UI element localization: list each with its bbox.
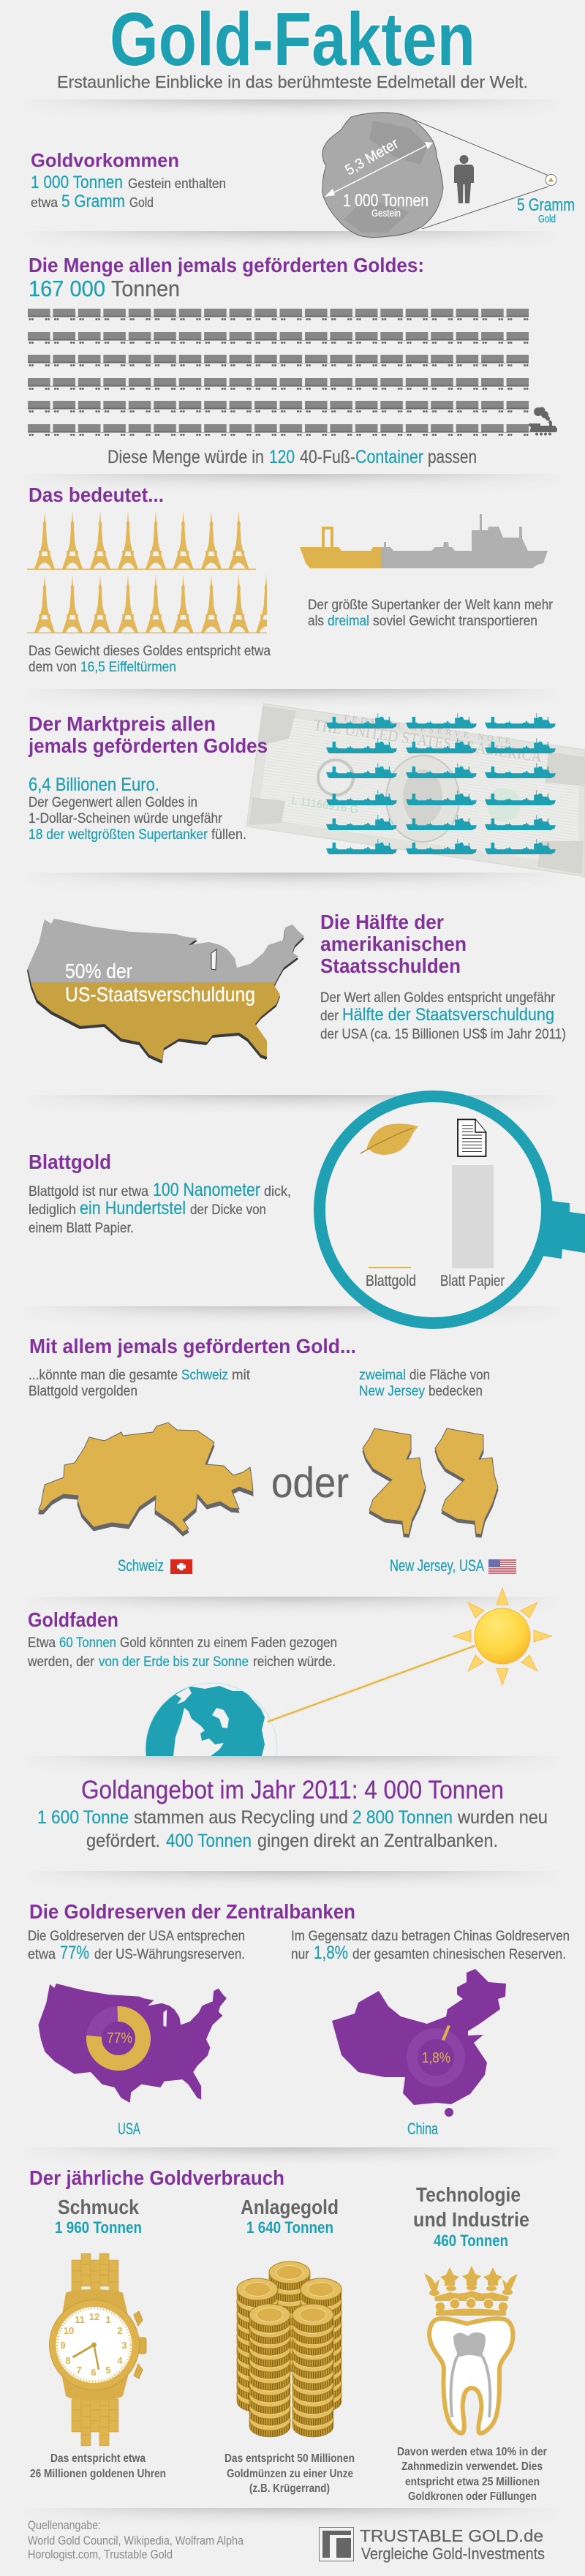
caption: passen: [428, 447, 477, 467]
text block: einem Blatt Papier.: [29, 1221, 134, 1236]
icon: watch: 11: [75, 2314, 85, 2325]
icon: watch: 6: [91, 2367, 97, 2378]
text left: [29, 1368, 251, 1399]
column: Schmuck: 1 960 Tonnen: [55, 2218, 142, 2237]
text left: ...könnte man die gesamte: [29, 1368, 178, 1383]
panel: Marktpreis: [28, 704, 585, 877]
gold thread: [268, 1646, 475, 1722]
label: 5 Gramm: [517, 195, 575, 225]
text block: 60 Tonnen: [59, 1635, 116, 1651]
text: tanker: soviel Gewicht transportieren: [373, 614, 537, 629]
heading: [28, 712, 268, 757]
icon: earth: [145, 1682, 278, 1756]
big number: 167 000: [29, 276, 105, 301]
image: dollar bill: THE UNITED STATES OF AMERICA: [312, 715, 543, 766]
map: USA split: US-Staatsverschuldung: [65, 983, 255, 1006]
text right: bedecken: [429, 1384, 483, 1399]
footer: sources: Quellenangabe:: [28, 2518, 101, 2532]
text: tanker: [308, 598, 554, 629]
icon: sun: [453, 1588, 551, 1685]
text block: werden, der: [27, 1654, 95, 1670]
heading: Die Hälfte der: [320, 911, 444, 933]
icon: rock: [322, 113, 443, 237]
caption: Zahnmedizin verwendet. Dies: [401, 2460, 543, 2473]
text: Eiffel: 16,5 Eiffeltürmen: [80, 660, 176, 675]
icon: watch: 9: [60, 2340, 66, 2351]
heading: [320, 911, 467, 977]
heading: Blattgold: [29, 1150, 111, 1173]
heading: Der jährliche Goldverbrauch: [29, 2166, 284, 2189]
text left: Schweiz: [181, 1368, 228, 1383]
labels: Blatt Papier: [440, 1273, 505, 1289]
text block: [37, 1807, 548, 1851]
text block: stammen aus Recycling und: [134, 1807, 348, 1828]
column: Anlagegold: (z.B. Krügerrand): [249, 2482, 330, 2495]
text: tanker: dreimal: [328, 614, 369, 629]
labels: USA: [118, 2120, 140, 2138]
text block: 100 Nanometer: [153, 1180, 260, 1200]
map: USA with donut 77%: [38, 1984, 227, 2103]
text block: füllen.: [211, 827, 246, 843]
subtitle: Erstaunliche Einblicke in das berühmteste Edelmetall der Welt.: [57, 72, 528, 91]
text block: lediglich: [29, 1202, 76, 1218]
label: New Jersey: New Jersey, USA: [390, 1556, 484, 1575]
text: Eiffel: dem von: [29, 660, 77, 675]
text right: die Fläche von: [410, 1368, 490, 1383]
text right: New Jersey: [359, 1384, 425, 1399]
map: USA split: [27, 919, 304, 1063]
text block: reichen würde.: [253, 1654, 336, 1670]
heading: Mit allem jemals geförderten Gold...: [29, 1335, 356, 1357]
map: New Jersey twice: [363, 1428, 498, 1537]
icon: watch: 3: [121, 2340, 127, 2351]
map: USA split: 50% der: [65, 960, 132, 982]
text block: etwa: [31, 195, 58, 210]
icon: person: [454, 155, 474, 203]
icon: magnifier: [320, 1096, 585, 1323]
text block: der Dicke von: [190, 1202, 266, 1218]
icon: tanker: [300, 514, 548, 568]
big number: Tonnen: [111, 276, 180, 301]
icon: gold dot: [546, 174, 556, 186]
logo: Trustable Gold: [319, 2526, 545, 2563]
heading: Goldvorkommen: [31, 149, 179, 171]
text right: [291, 1929, 570, 1963]
text right: [359, 1368, 490, 1399]
icon: watch: 5: [105, 2365, 111, 2376]
heading: Staatsschulden: [320, 954, 461, 977]
icon: rock: 1 000 Tonnen: [343, 191, 429, 211]
caption: [397, 2446, 547, 2503]
heading: Der Marktpreis allen: [29, 712, 216, 735]
text block: Der Gegenwert allen Goldes in: [29, 795, 197, 810]
icon: watch: 4: [117, 2355, 123, 2366]
text right: zweimal: [359, 1368, 406, 1383]
text: tanker: Der größte Supertanker der Welt kann mehr: [308, 598, 554, 613]
footer: sources: [28, 2518, 244, 2561]
text block: Gestein enthalten: [128, 176, 226, 191]
column: Anlagegold: 1 640 Tonnen: [246, 2218, 333, 2237]
map: China with donut 1,8%: [332, 1969, 506, 2117]
heading: Die Goldreserven der Zentralbanken: [29, 1900, 355, 1923]
labels: Blattgold: [366, 1273, 416, 1289]
icon: watch: 2: [117, 2325, 123, 2336]
text right: nur: [291, 1947, 310, 1962]
big number: [29, 276, 180, 301]
text block: 400 Tonnen: [166, 1831, 252, 1851]
map: USA with donut 77%: 77%: [107, 2030, 132, 2046]
column: Anlagegold: [224, 2196, 355, 2495]
text left: der US-Währungsreserven.: [94, 1947, 245, 1962]
icon: locomotive: [529, 407, 557, 436]
caption: entspricht etwa 25 Millionen: [405, 2476, 540, 2488]
text block: der: [320, 1009, 339, 1024]
image: dollar bill: L 11166916 G: [290, 794, 359, 816]
text: Eiffel: [29, 644, 271, 675]
heading: amerikanischen: [320, 933, 467, 955]
label: Schweiz: Schweiz: [118, 1556, 164, 1575]
icon: tooth: [429, 2319, 513, 2433]
column: Schmuck: Das entspricht etwa: [50, 2452, 146, 2465]
text right: der gesamten chinesischen Reserven.: [352, 1947, 566, 1962]
text block: [27, 1635, 337, 1670]
panel: Goldverbrauch: [29, 2166, 547, 2503]
text: oder: oder: [271, 1459, 349, 1507]
chart: supertanker grid: [326, 713, 556, 854]
column: Schmuck: 26 Millionen goldenen Uhren: [30, 2468, 166, 2480]
icon: gold leaf: [361, 1123, 418, 1155]
labels: [366, 1273, 505, 1289]
caption: 120: [269, 447, 295, 467]
caption: Goldkronen oder Füllungen: [408, 2490, 537, 2503]
panel: Das bedeutet: [27, 483, 554, 675]
footer: sources: World Gold Council, Wikipedia, Wolfram Alpha: [28, 2534, 244, 2547]
heading: Die Menge allen jemals geförderten Goldes:: [29, 254, 424, 276]
image: dollar bill: FEDERAL RESERVE NOTE: [344, 712, 511, 746]
heading: Goldfaden: [28, 1608, 118, 1631]
text block: Blattgold ist nur etwa: [29, 1184, 148, 1200]
text block: von der Erde bis zur Sonne: [99, 1654, 249, 1670]
icon: watch: 1: [105, 2314, 111, 2325]
icon: rock: 5,3 Meter: [342, 135, 401, 178]
icon: watch: 7: [76, 2365, 82, 2376]
icon: rock: Gestein: [371, 207, 401, 219]
panel: Menge: [28, 254, 557, 467]
icon: coin stacks: [237, 2261, 341, 2437]
text block: [29, 775, 246, 843]
text left: Die Goldreserven der USA entsprechen: [28, 1929, 245, 1944]
column: Anlagegold: Goldmünzen zu einer Unze: [227, 2468, 353, 2480]
text: tanker: als: [308, 614, 324, 629]
logo: Trustable Gold: Vergleiche Gold-Investments: [361, 2545, 545, 2563]
panel: Goldreserven: [28, 1900, 570, 2138]
chart: train wagons: [28, 309, 529, 437]
column: Technologie: [397, 2183, 547, 2503]
icon: crown: [424, 2266, 518, 2316]
chart: Eiffel towers row 2: [27, 574, 276, 633]
column: Technologie: Technologie: [416, 2183, 521, 2206]
column: Anlagegold: Anlagegold: [241, 2196, 339, 2218]
text block: dick,: [264, 1184, 291, 1200]
caption: Davon werden etwa 10% in der: [397, 2446, 547, 2458]
column: Schmuck: Schmuck: [58, 2196, 139, 2218]
icon: watch: [50, 2253, 146, 2446]
text block: gefördert.: [86, 1831, 160, 1851]
bar: paper: [452, 1165, 494, 1268]
text block: Hälfte der Staatsverschuldung: [342, 1005, 554, 1025]
text block: Gold: [129, 195, 154, 210]
column: Technologie: und Industrie: [413, 2208, 529, 2231]
heading: jemals geförderten Goldes: [28, 734, 268, 757]
text block: Etwa: [28, 1635, 56, 1651]
text: Eiffel: Das Gewicht dieses Goldes entspricht etwa: [29, 644, 271, 659]
panel: Staatsschulden: [27, 911, 566, 1063]
labels: China: [407, 2120, 439, 2138]
text block: gingen direkt an Zentralbanken.: [257, 1831, 498, 1851]
text block: 1 000 Tonnen: [31, 173, 123, 192]
column: Technologie: 460 Tonnen: [434, 2232, 508, 2250]
text left: Blattgold vergolden: [29, 1384, 137, 1399]
text block: [29, 1180, 291, 1236]
labels: [118, 2120, 439, 2138]
footer: sources: Horologist.com, Trustable Gold: [28, 2547, 173, 2561]
heading: Das bedeutet...: [29, 483, 164, 506]
caption: 40-Fuß-: [300, 447, 355, 467]
text right: 1,8%: [314, 1943, 348, 1963]
text block: [320, 990, 566, 1042]
icon: watch: 8: [65, 2355, 71, 2366]
label: 5 Gramm: Gold: [538, 213, 556, 225]
text left: [28, 1929, 245, 1963]
caption: [107, 447, 477, 467]
text block: 5 Gramm: [61, 192, 125, 211]
bar: gold leaf: [369, 1267, 411, 1268]
column: Schmuck: [30, 2196, 166, 2480]
chart: Eiffel towers row 1: [27, 511, 256, 570]
column: Anlagegold: Das entspricht 50 Millionen: [224, 2452, 355, 2465]
text block: 1-Dollar-Scheinen würde ungefähr: [29, 811, 223, 826]
panel: Goldfaden: [28, 1587, 553, 1756]
text block: wurden neu: [457, 1807, 548, 1828]
panel: vergolden: [29, 1335, 516, 1575]
text block: 6,4 Billionen Euro.: [29, 775, 159, 795]
caption: Container: [355, 447, 423, 467]
text left: 77%: [60, 1943, 89, 1963]
logo: Trustable Gold: TRUSTABLE GOLD.de: [360, 2526, 543, 2545]
panel: Goldvorkommen: [31, 113, 575, 237]
icon: watch: 12: [89, 2311, 99, 2322]
map: China with donut 1,8%: 1,8%: [422, 2050, 450, 2066]
panel: Goldangebot: [37, 1776, 548, 1851]
heading: Goldangebot im Jahr 2011: 4 000 Tonnen: [81, 1776, 504, 1804]
text left: etwa: [28, 1947, 56, 1962]
caption: Diese Menge würde in: [107, 447, 264, 467]
map: Switzerland: [39, 1423, 253, 1536]
text left: mit: [232, 1368, 251, 1383]
icon: watch: 10: [64, 2325, 74, 2336]
text block: 2 800 Tonnen: [352, 1807, 453, 1828]
text block: [31, 173, 226, 211]
text block: 1 600 Tonne: [37, 1807, 129, 1828]
text block: ein Hundertstel: [80, 1198, 186, 1219]
panel: Blattgold: [29, 1096, 585, 1323]
text block: 18 der weltgrößten Supertanker: [29, 827, 208, 843]
icon: document: [458, 1119, 486, 1156]
lines from rock to gold dot: [412, 119, 548, 229]
text block: Der Wert allen Goldes entspricht ungefähr: [320, 990, 556, 1006]
text block: Gold könnten zu einem Faden gezogen: [120, 1635, 337, 1651]
image: dollar bill: [246, 704, 585, 877]
